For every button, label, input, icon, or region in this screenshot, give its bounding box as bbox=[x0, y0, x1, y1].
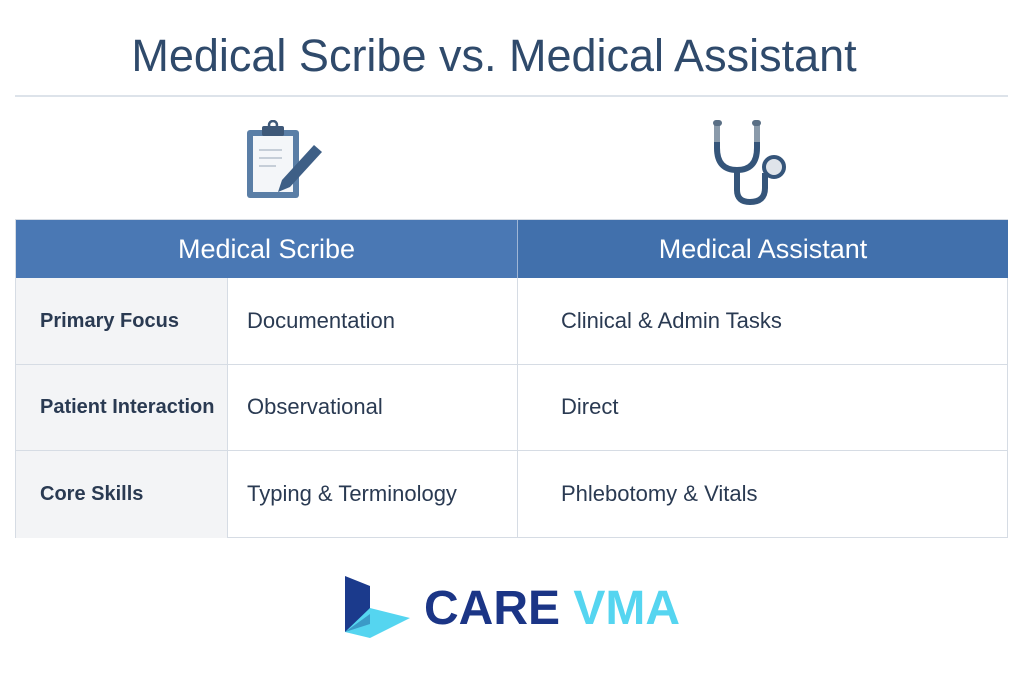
row: core skills: Typing & Terminology bbox=[247, 481, 457, 506]
icon: clipboard bbox=[247, 120, 322, 198]
row: primary focus: Clinical & Admin Tasks bbox=[561, 308, 782, 333]
logo bbox=[345, 576, 680, 638]
header: medical scribe: Medical Scribe bbox=[178, 234, 355, 264]
row: core skills: Phlebotomy & Vitals bbox=[561, 481, 757, 506]
title: Medical Scribe vs. Medical Assistant bbox=[131, 30, 857, 81]
row: core skills bbox=[40, 481, 757, 506]
logo: CARE VMA bbox=[424, 582, 680, 635]
row: primary focus bbox=[40, 308, 782, 333]
row: primary focus: Primary Focus bbox=[40, 310, 179, 332]
table bbox=[15, 219, 1008, 538]
header: medical assistant bbox=[517, 220, 1008, 278]
icon: stethoscope bbox=[713, 120, 786, 205]
row: patient interaction: Direct bbox=[561, 394, 618, 419]
row: patient interaction bbox=[40, 394, 618, 419]
row: core skills: Core Skills bbox=[40, 482, 143, 504]
row: primary focus: Documentation bbox=[247, 308, 395, 333]
header: medical assistant: Medical Assistant bbox=[659, 234, 867, 264]
row: patient interaction: Observational bbox=[247, 394, 383, 419]
row: patient interaction: Patient Interaction bbox=[40, 396, 214, 418]
header: medical scribe bbox=[16, 220, 517, 278]
